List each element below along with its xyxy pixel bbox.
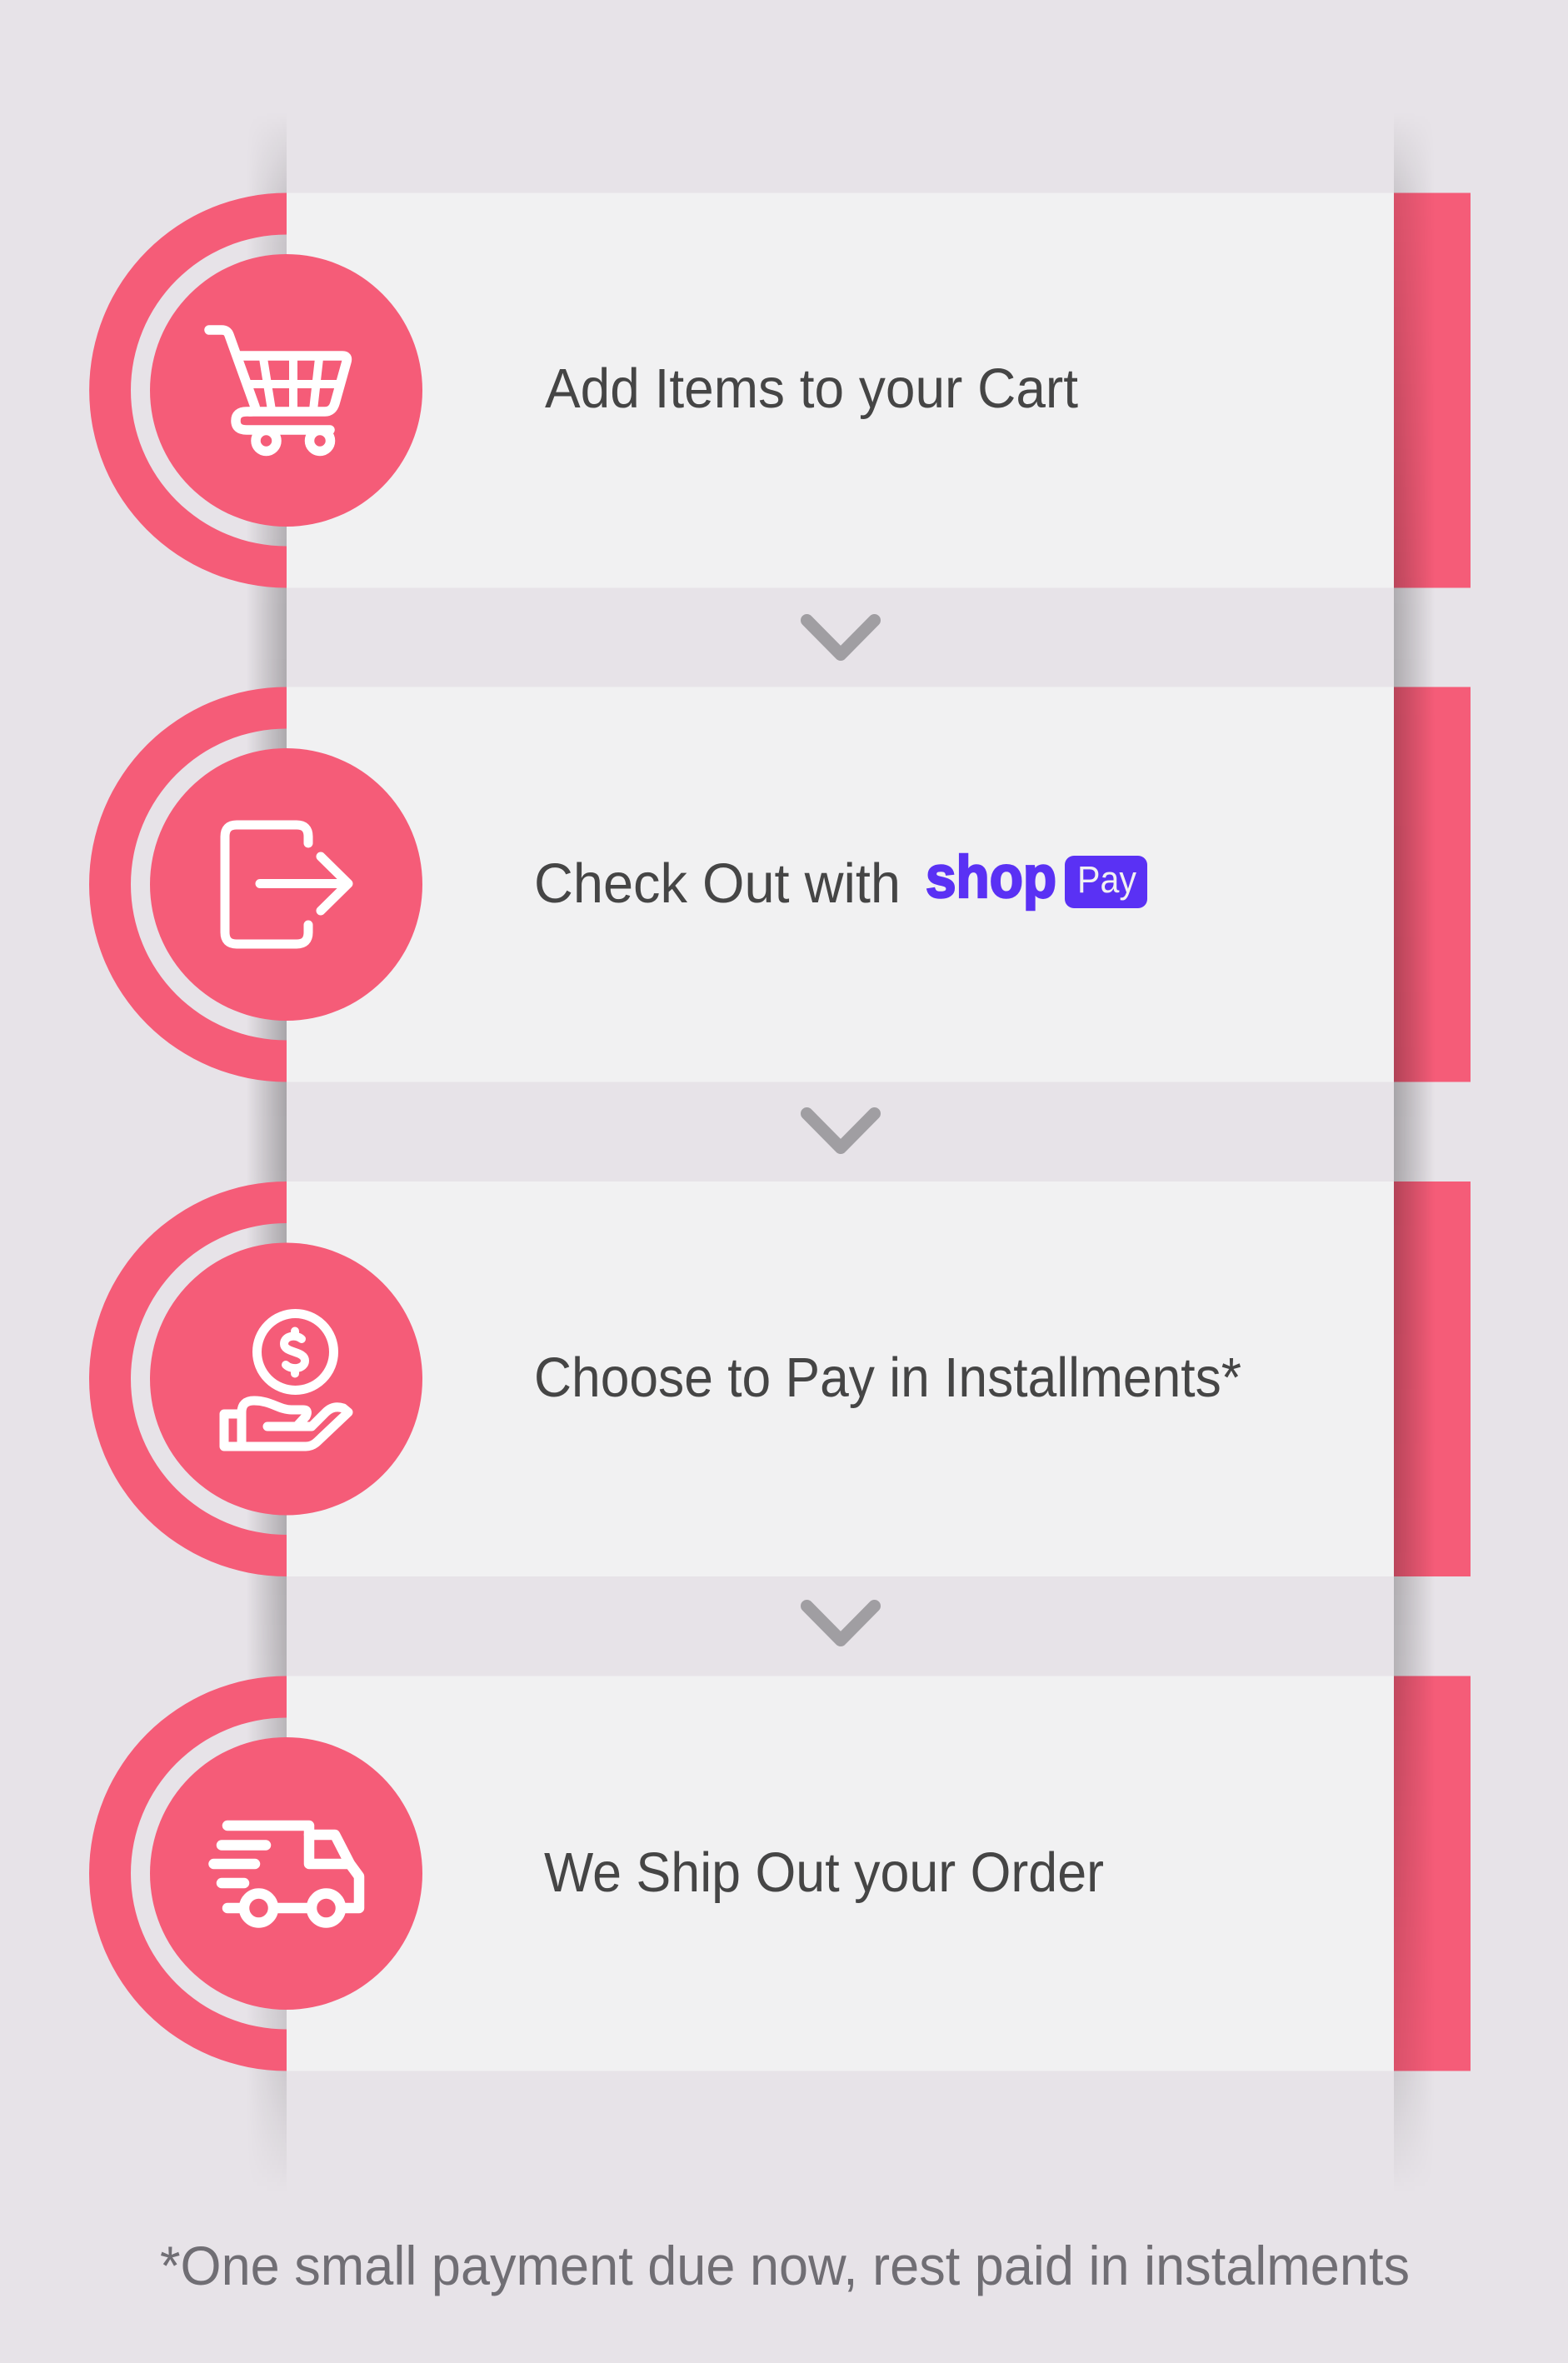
step 4 panel [287,1676,1394,2071]
step 1 label: Add Items to your Cart [545,357,1078,420]
right vertical shadow [1394,135,1430,2156]
shop pay logo [926,845,1147,911]
right side accent bars [1394,193,1471,2071]
step 3 icon disc [150,1243,422,1515]
step 4 outer ring [89,1676,287,2071]
shop wordmark: shop [926,845,1056,911]
step 4 label: We Ship Out your Order [544,1841,1104,1904]
step 1 panel [287,193,1394,588]
step 2 icon disc [150,748,422,1021]
pay text: Pay [1077,858,1136,901]
step 1: add items to cart [89,193,1394,588]
arrow: chevron 2 [806,1113,875,1148]
step 4: we ship out order [89,1676,1394,2071]
step 3 label: Choose to Pay in Installments* [534,1346,1241,1409]
step 2 outer ring [89,687,287,1082]
step 4 icon disc [150,1737,422,2010]
icon: shopping cart [209,330,347,452]
arrow: chevron 1 [806,620,875,655]
icon: exit arrow [225,825,348,944]
step 1 outer ring [89,193,287,588]
footnote: *One small payment due now, rest paid in instalments [160,2235,1410,2296]
icon: coin over hand [224,1313,348,1446]
arrow: chevron 3 [806,1606,875,1640]
step 3 panel [287,1182,1394,1576]
step 1 icon disc [150,254,422,527]
step 3 outer ring [89,1182,287,1576]
pay badge [1065,856,1147,908]
left vertical shadow [252,135,287,2156]
step 3: pay in installments [89,1182,1394,1576]
icon: delivery truck [213,1826,359,1923]
step 2 panel [287,687,1394,1082]
step 2: check out with shop pay [89,687,1394,1082]
step 2 label: Check Out with [534,852,901,915]
